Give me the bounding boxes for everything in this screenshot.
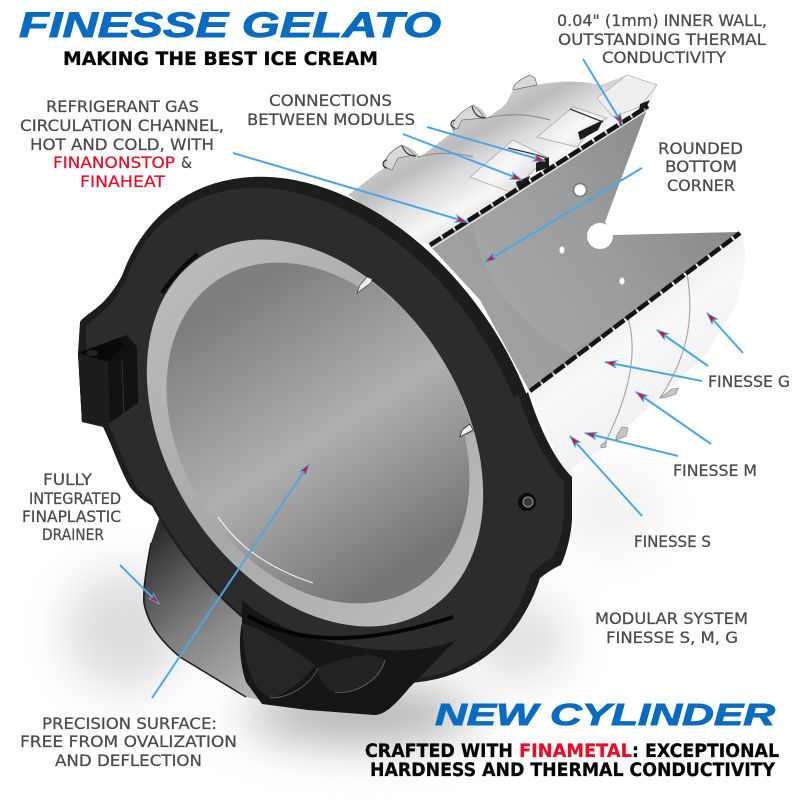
label: refrigerant gas channel: CIRCULATION CHANNEL, — [20, 116, 224, 135]
ring face — [26, 109, 626, 759]
label: modular system — [595, 609, 748, 647]
black ring — [78, 176, 572, 687]
label: refrigerant gas channel: FINANONSTOP — [53, 153, 175, 172]
label: inner wall: CONDUCTIVITY — [602, 48, 726, 67]
notch details — [357, 277, 473, 437]
upper cylinder body — [348, 75, 657, 246]
arrow: inner wall — [583, 59, 623, 125]
label: drainer — [22, 470, 121, 544]
raised module panels — [470, 75, 657, 192]
heading: new cylinder: NEW CYLINDER — [435, 697, 776, 732]
label: inner wall: OUTSTANDING THERMAL — [558, 30, 766, 49]
thin channel strips — [430, 106, 740, 391]
title: FINESSE GELATO — [19, 6, 441, 45]
label: finesse m: FINESSE M — [673, 461, 757, 480]
module seams — [418, 115, 550, 157]
arrow: precision surface — [152, 464, 309, 698]
arrow: connection two — [403, 134, 522, 180]
subtitle: MAKING THE BEST ICE CREAM — [63, 49, 378, 70]
lower seams and tabs — [601, 273, 690, 448]
label: precision surface: FREE FROM OVALIZATION — [20, 732, 237, 751]
label: precision surface: PRECISION SURFACE: — [42, 714, 217, 733]
label: refrigerant gas channel: FINAHEAT — [80, 172, 165, 191]
cut plate — [430, 107, 738, 392]
drainer lower edge — [144, 543, 246, 697]
arrow: finesse g three — [605, 362, 702, 381]
label: drainer: FULLY — [43, 470, 92, 489]
label: connections between modules: CONNECTIONS — [269, 91, 392, 110]
label: inner wall — [557, 11, 767, 67]
drainer — [144, 510, 320, 710]
label: refrigerant gas channel: REFRIGERANT GAS — [46, 97, 199, 116]
label: refrigerant gas channel: & — [181, 153, 192, 172]
tagline: HARDNESS AND THERMAL CONDUCTIVITY — [370, 760, 776, 781]
label: inner wall: 0.04" (1mm) INNER WALL, — [557, 11, 767, 30]
tabs on top — [383, 75, 537, 170]
tagline: : EXCEPTIONAL — [632, 741, 779, 762]
label: modular system: FINESSE S, M, G — [606, 628, 738, 647]
cylinder illustration — [78, 74, 745, 715]
label: finesse g: FINESSE G — [708, 372, 790, 391]
slot above light ring — [162, 254, 198, 293]
plate holes — [560, 184, 624, 284]
label: refrigerant gas channel: HOT AND COLD, WITH — [30, 135, 214, 154]
tagline: CRAFTED WITH — [365, 741, 513, 762]
label: finesse s: FINESSE S — [634, 532, 711, 551]
label: rounded bottom corner — [658, 139, 743, 195]
ground shadow — [65, 470, 660, 741]
label: precision surface — [20, 714, 237, 770]
small fastener — [518, 493, 536, 511]
inner precision surface — [166, 262, 474, 604]
label: rounded bottom corner: CORNER — [667, 176, 735, 195]
arrow: finesse m two — [585, 433, 678, 456]
arrow: drainer — [120, 565, 159, 604]
label: connections between modules: BETWEEN MODULES — [247, 110, 415, 129]
spout black lower part — [240, 600, 456, 715]
ring outer shape — [19, 95, 641, 765]
rounded corner area — [472, 100, 760, 353]
arrow: refrigerant channel — [233, 153, 467, 222]
label: precision surface: AND DEFLECTION — [55, 751, 202, 770]
arrow: finesse g one — [707, 313, 743, 353]
label: drainer: FINAPLASTIC — [22, 507, 121, 526]
label: connections between modules — [247, 91, 415, 129]
arrow: finesse m one — [636, 392, 711, 444]
label: rounded bottom corner: ROUNDED — [658, 139, 743, 158]
wedge edge highlight — [218, 517, 313, 583]
lower cylinder body — [530, 233, 745, 490]
tagline: FINAMETAL — [519, 741, 632, 762]
label: modular system: MODULAR SYSTEM — [595, 609, 748, 628]
light inner ring — [146, 240, 484, 626]
left latch block — [78, 335, 138, 423]
arrow: connection one — [427, 127, 545, 161]
arrow: rounded corner — [485, 168, 642, 262]
label: rounded bottom corner: BOTTOM — [665, 157, 737, 176]
tagline — [365, 741, 779, 781]
arrow: finesse s — [570, 436, 642, 516]
label: drainer: DRAINER — [42, 525, 104, 544]
label: drainer: INTEGRATED — [29, 489, 121, 508]
label: refrigerant gas channel — [20, 97, 224, 191]
arrow: finesse g two — [657, 330, 708, 366]
